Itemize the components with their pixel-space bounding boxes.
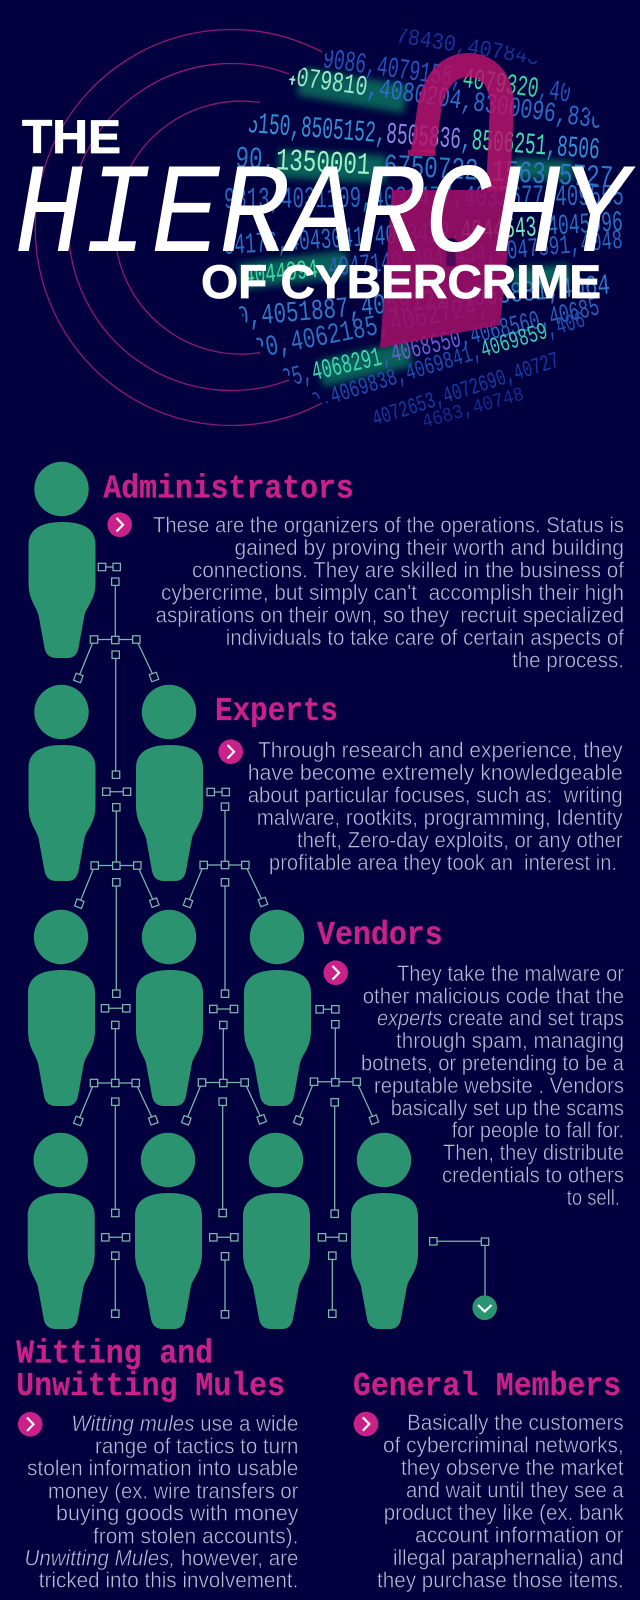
panel: general members (353, 1368, 624, 1592)
body text: product they like (ex. bank (384, 1500, 624, 1525)
header artwork: number globe (223, 23, 624, 435)
body text (24, 1411, 299, 1593)
header artwork: number globe: 20,4062185,4062724, (250, 289, 492, 367)
icon: bullet (218, 739, 243, 764)
panel: vendors (317, 917, 624, 1210)
figure: mules row (28, 1133, 418, 1329)
icon: bullet (18, 1412, 42, 1437)
body text: Unwitting Mules, however, are (24, 1546, 298, 1571)
body text: credentials to others (442, 1163, 624, 1188)
body text: from stolen accounts). (93, 1523, 298, 1548)
body text: through spam, managing (396, 1028, 624, 1053)
panel: administrators (103, 470, 625, 672)
body text (153, 512, 625, 672)
header artwork: number globe: 9086,4079155,4079320,40 (321, 43, 573, 111)
body text (377, 1410, 624, 1592)
body text: money (ex. wire transfers or (48, 1478, 299, 1503)
body text: the process. (512, 648, 624, 672)
network connector lines (74, 563, 489, 1318)
figure: administrator (28, 462, 96, 658)
body text: Through research and experience, they (258, 738, 623, 763)
body text: Witting mules use a wide (71, 1411, 298, 1436)
body text: they observe the market (401, 1455, 624, 1480)
body text (361, 961, 624, 1210)
figure: experts row (28, 685, 203, 881)
body text: to sell. (567, 1185, 620, 1210)
heading: Vendors (317, 917, 443, 954)
body text: have become extremely knowledgeable (248, 760, 623, 785)
heading: Experts (215, 693, 338, 730)
icon: bullet (107, 512, 132, 537)
heading: Administrators (103, 470, 354, 507)
heading (16, 1335, 285, 1405)
body text: buying goods with money (56, 1501, 299, 1526)
body text: Basically the customers (407, 1410, 624, 1435)
icon: bullet (323, 960, 348, 985)
header artwork: number globe: 4683,40748 (420, 384, 527, 435)
figure: vendors row (28, 910, 311, 1106)
body text: stolen information into usable (27, 1456, 298, 1481)
heading: Unwitting Mules (16, 1368, 285, 1405)
header artwork: number globe: 78430,407843 (394, 23, 541, 72)
panel: experts (215, 693, 623, 875)
body text: account information or (415, 1522, 624, 1548)
body text: of cybercriminal networks, (383, 1432, 624, 1458)
body text: gained by proving their worth and building (234, 535, 624, 560)
body text: they purchase those items. (377, 1568, 624, 1592)
body text: range of tactics to turn (95, 1433, 298, 1458)
body text: tricked into this involvement. (39, 1568, 298, 1593)
title: THE (22, 110, 121, 163)
body text (248, 738, 623, 875)
header artwork: number globe: 9,4069838,4069841,4069859,406 (308, 308, 589, 417)
heading: Witting and (16, 1335, 213, 1372)
header artwork: number globe: 5150,8505152,8505836,8506251,8506 (246, 108, 601, 168)
icon: open padlock (380, 65, 514, 348)
body text: experts create and set traps (377, 1006, 624, 1031)
body text: illegal paraphernalia) and (393, 1545, 624, 1570)
icon: bullet (354, 1412, 378, 1436)
header artwork: concentric rings (35, 29, 322, 426)
panel: witting and unwitting mules (16, 1335, 299, 1593)
title: OF CYBERCRIME (201, 255, 601, 308)
icon: green down chevron (472, 1295, 497, 1320)
